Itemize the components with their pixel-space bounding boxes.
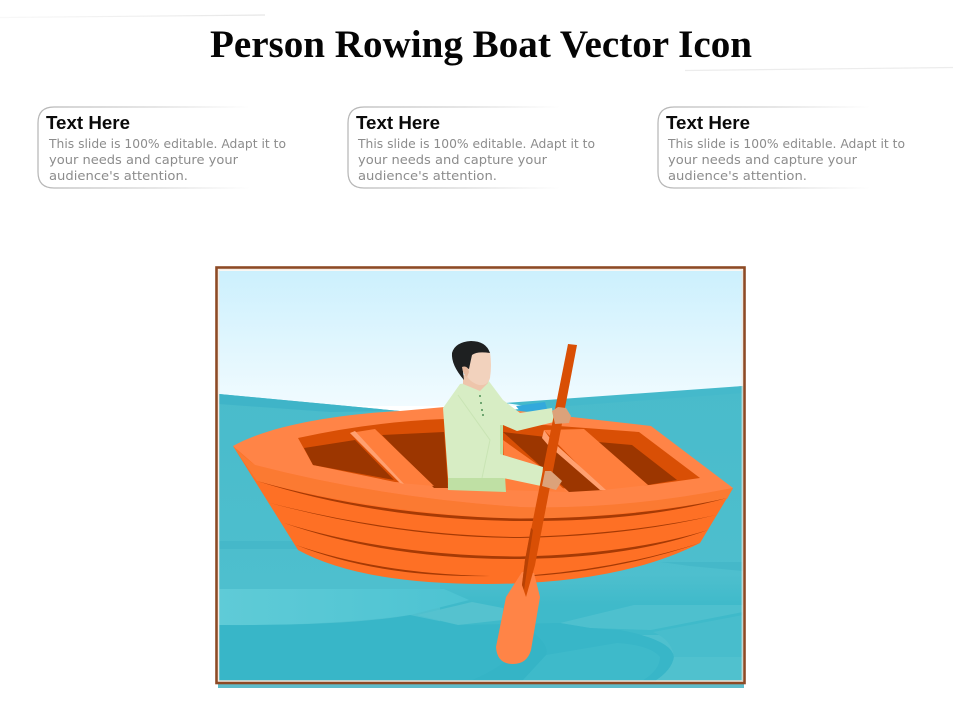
card 1 body text: your needs and capture your <box>49 152 239 167</box>
oar shadow <box>470 630 547 681</box>
panel: text card 3 <box>658 107 905 188</box>
frame <box>216 268 744 683</box>
hull plank lines <box>257 481 727 521</box>
card 1 body text <box>48 136 286 183</box>
shirt <box>443 380 554 486</box>
rim <box>233 407 733 507</box>
card 1 heading: Text Here <box>46 113 130 133</box>
card 3 body text: your needs and capture your <box>668 152 858 167</box>
ear <box>462 367 469 377</box>
neck and face <box>463 375 488 391</box>
bench seats <box>350 429 434 486</box>
scene background <box>219 271 743 681</box>
oar <box>496 344 577 664</box>
light wave patches <box>440 602 503 625</box>
card 2 heading: Text Here <box>356 113 440 133</box>
card 1 body text: audience's attention. <box>49 168 188 183</box>
card 3 body text <box>667 136 905 183</box>
oar blade <box>496 572 540 664</box>
hair <box>452 341 490 380</box>
interior floor <box>304 440 394 480</box>
card 2 body text: audience's attention. <box>358 168 497 183</box>
title: Person Rowing Boat Vector Icon <box>210 23 752 66</box>
hands <box>542 407 571 490</box>
card 2 body text: This slide is 100% editable. Adapt it to <box>357 136 595 151</box>
card 1 body text: This slide is 100% editable. Adapt it to <box>48 136 286 151</box>
oar shaft <box>522 344 577 597</box>
dark water foreground <box>219 615 674 681</box>
card 3 body text: This slide is 100% editable. Adapt it to <box>667 136 905 151</box>
panel: text card 1 <box>38 107 286 188</box>
rim side band <box>233 446 733 519</box>
card 2 body text <box>357 136 595 183</box>
mid water tone <box>440 592 743 635</box>
card 3 body text: audience's attention. <box>668 168 807 183</box>
lower hand <box>542 471 562 490</box>
card 3 heading: Text Here <box>666 113 750 133</box>
illustration: person rowing boat <box>216 268 744 688</box>
panel: text card 2 <box>348 107 595 188</box>
sky <box>219 271 743 406</box>
hull <box>233 446 733 584</box>
person <box>443 341 554 492</box>
shirt buttons <box>479 395 484 416</box>
upper hand <box>552 407 571 424</box>
light band left <box>219 589 469 625</box>
sea <box>219 386 743 681</box>
trousers <box>448 476 506 492</box>
card 2 body text: your needs and capture your <box>358 152 548 167</box>
water shadow under frame <box>218 682 744 688</box>
boat interior <box>298 419 700 490</box>
boat <box>233 407 733 584</box>
